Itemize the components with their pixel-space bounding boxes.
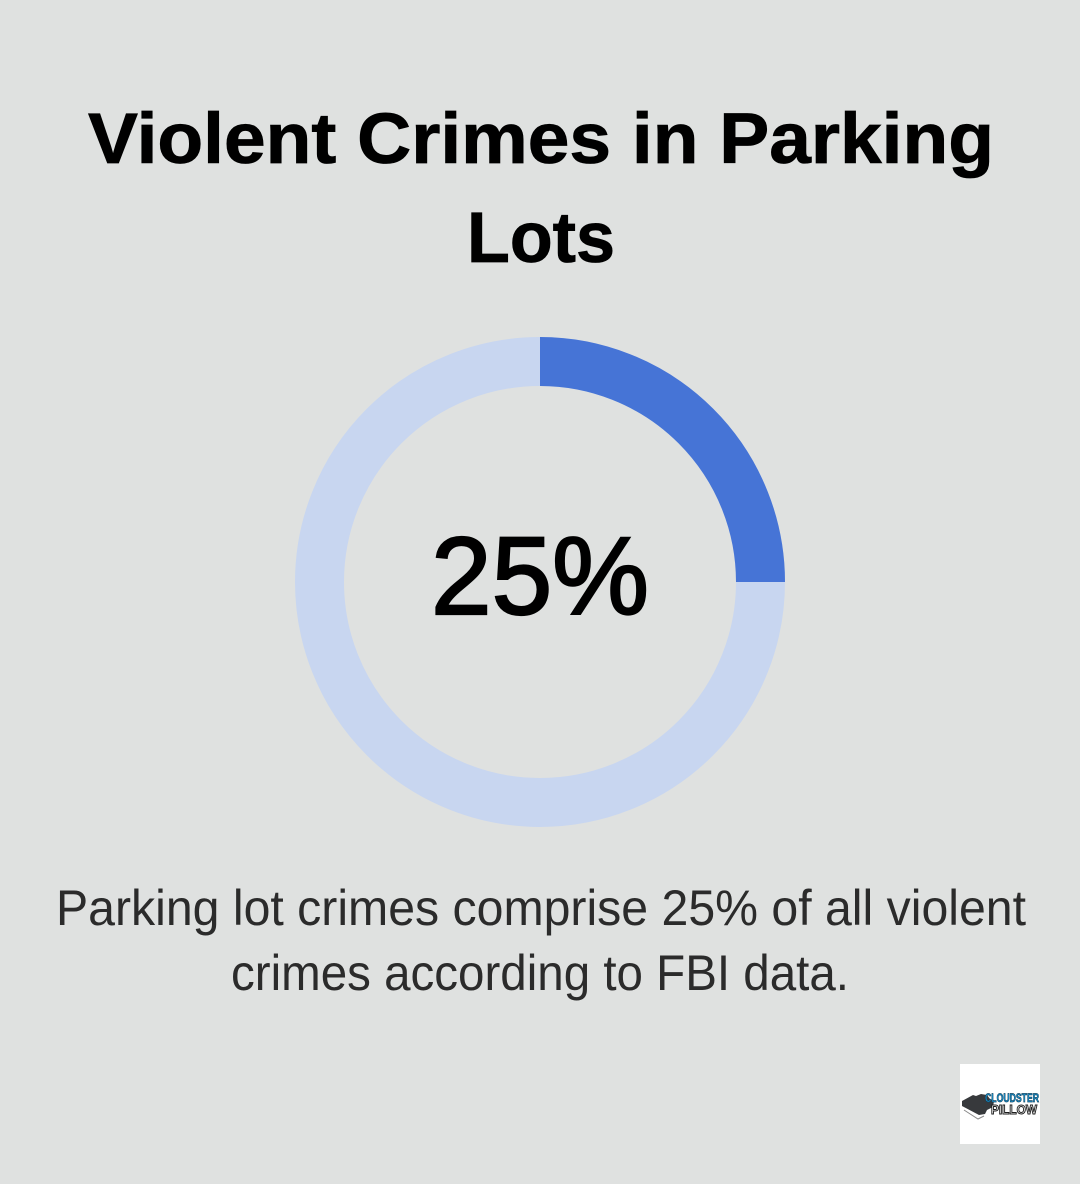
description text — [56, 880, 1026, 1001]
title: Lots — [467, 199, 615, 278]
title: Violent Crimes in Parking — [88, 100, 994, 179]
percentage value: 25% — [431, 515, 649, 638]
description text: Parking lot crimes comprise 25% of all violent — [56, 880, 1026, 936]
logo text: CLOUDSTER — [985, 1091, 1039, 1105]
logo text — [985, 1091, 1039, 1117]
description text: crimes according to FBI data. — [231, 945, 849, 1001]
icon: pillow — [962, 1094, 994, 1119]
logo text: PILLOW — [991, 1102, 1038, 1117]
donut chart — [320, 362, 760, 802]
logo — [960, 1064, 1040, 1144]
title — [88, 100, 994, 278]
